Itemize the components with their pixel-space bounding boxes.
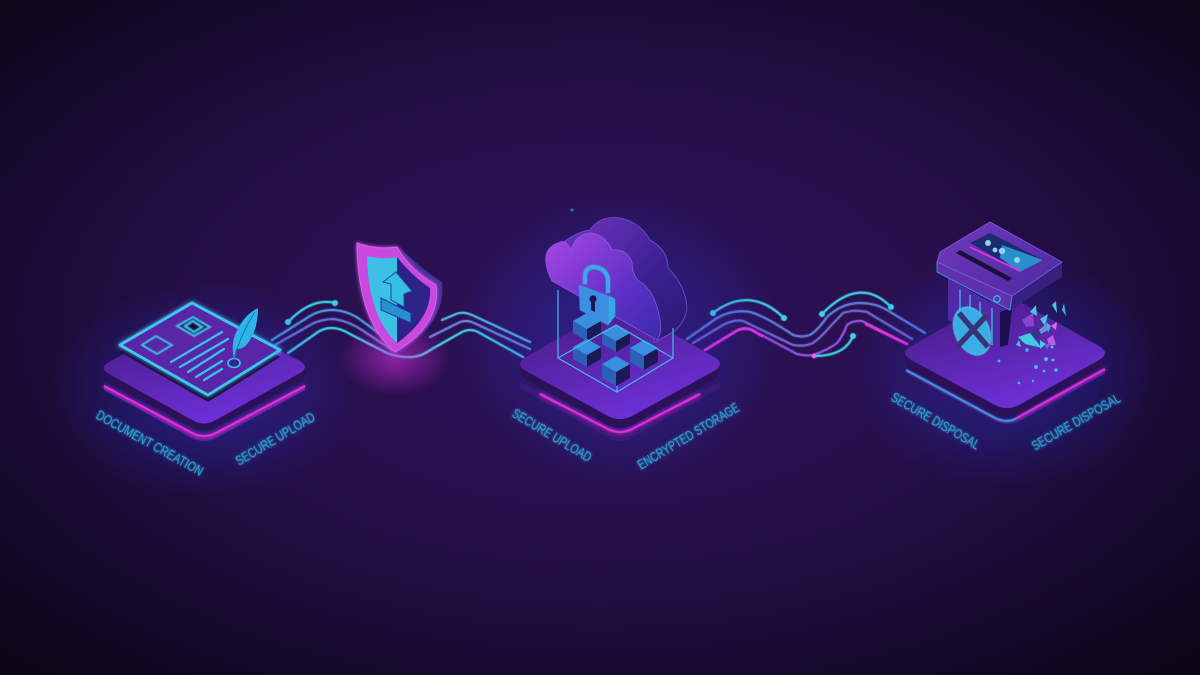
icon: cloud back xyxy=(560,218,687,342)
icon: cloud front xyxy=(546,233,661,340)
icon: document with quill xyxy=(120,303,280,402)
icon: encrypted cubes xyxy=(573,313,658,386)
label: encrypted storage: ENCRYPTED STORAGE xyxy=(634,399,742,473)
platform top xyxy=(520,364,720,428)
icon: upload shield xyxy=(339,243,451,396)
icon: upload arrow xyxy=(381,272,412,323)
label: secure disposal: SECURE DISPOSAL xyxy=(1028,390,1123,454)
label: secure disposal: SECURE DISPOSAL xyxy=(888,389,983,453)
panel: secure disposal platform xyxy=(850,222,1160,490)
platform base xyxy=(906,368,1105,424)
label: secure upload: SECURE UPLOAD xyxy=(509,405,595,465)
decorative spark xyxy=(570,208,574,212)
platform base xyxy=(104,385,305,441)
icon: document shredder xyxy=(937,222,1066,384)
connector: storage to disposal xyxy=(687,293,925,358)
label: document creation: DOCUMENT CREATION xyxy=(94,407,206,479)
panel: document creation platform xyxy=(50,280,360,500)
platform top xyxy=(104,367,305,430)
label: secure upload: SECURE UPLOAD xyxy=(232,409,318,469)
connector: creation to upload shield xyxy=(272,300,530,357)
icon: padlock xyxy=(579,267,615,325)
panel: encrypted storage platform xyxy=(455,185,785,495)
glass box outline xyxy=(558,290,673,392)
platform base xyxy=(520,382,720,441)
icon: shredded fragments xyxy=(973,301,1066,384)
platform top xyxy=(905,353,1105,417)
icon: x badge xyxy=(946,301,998,361)
